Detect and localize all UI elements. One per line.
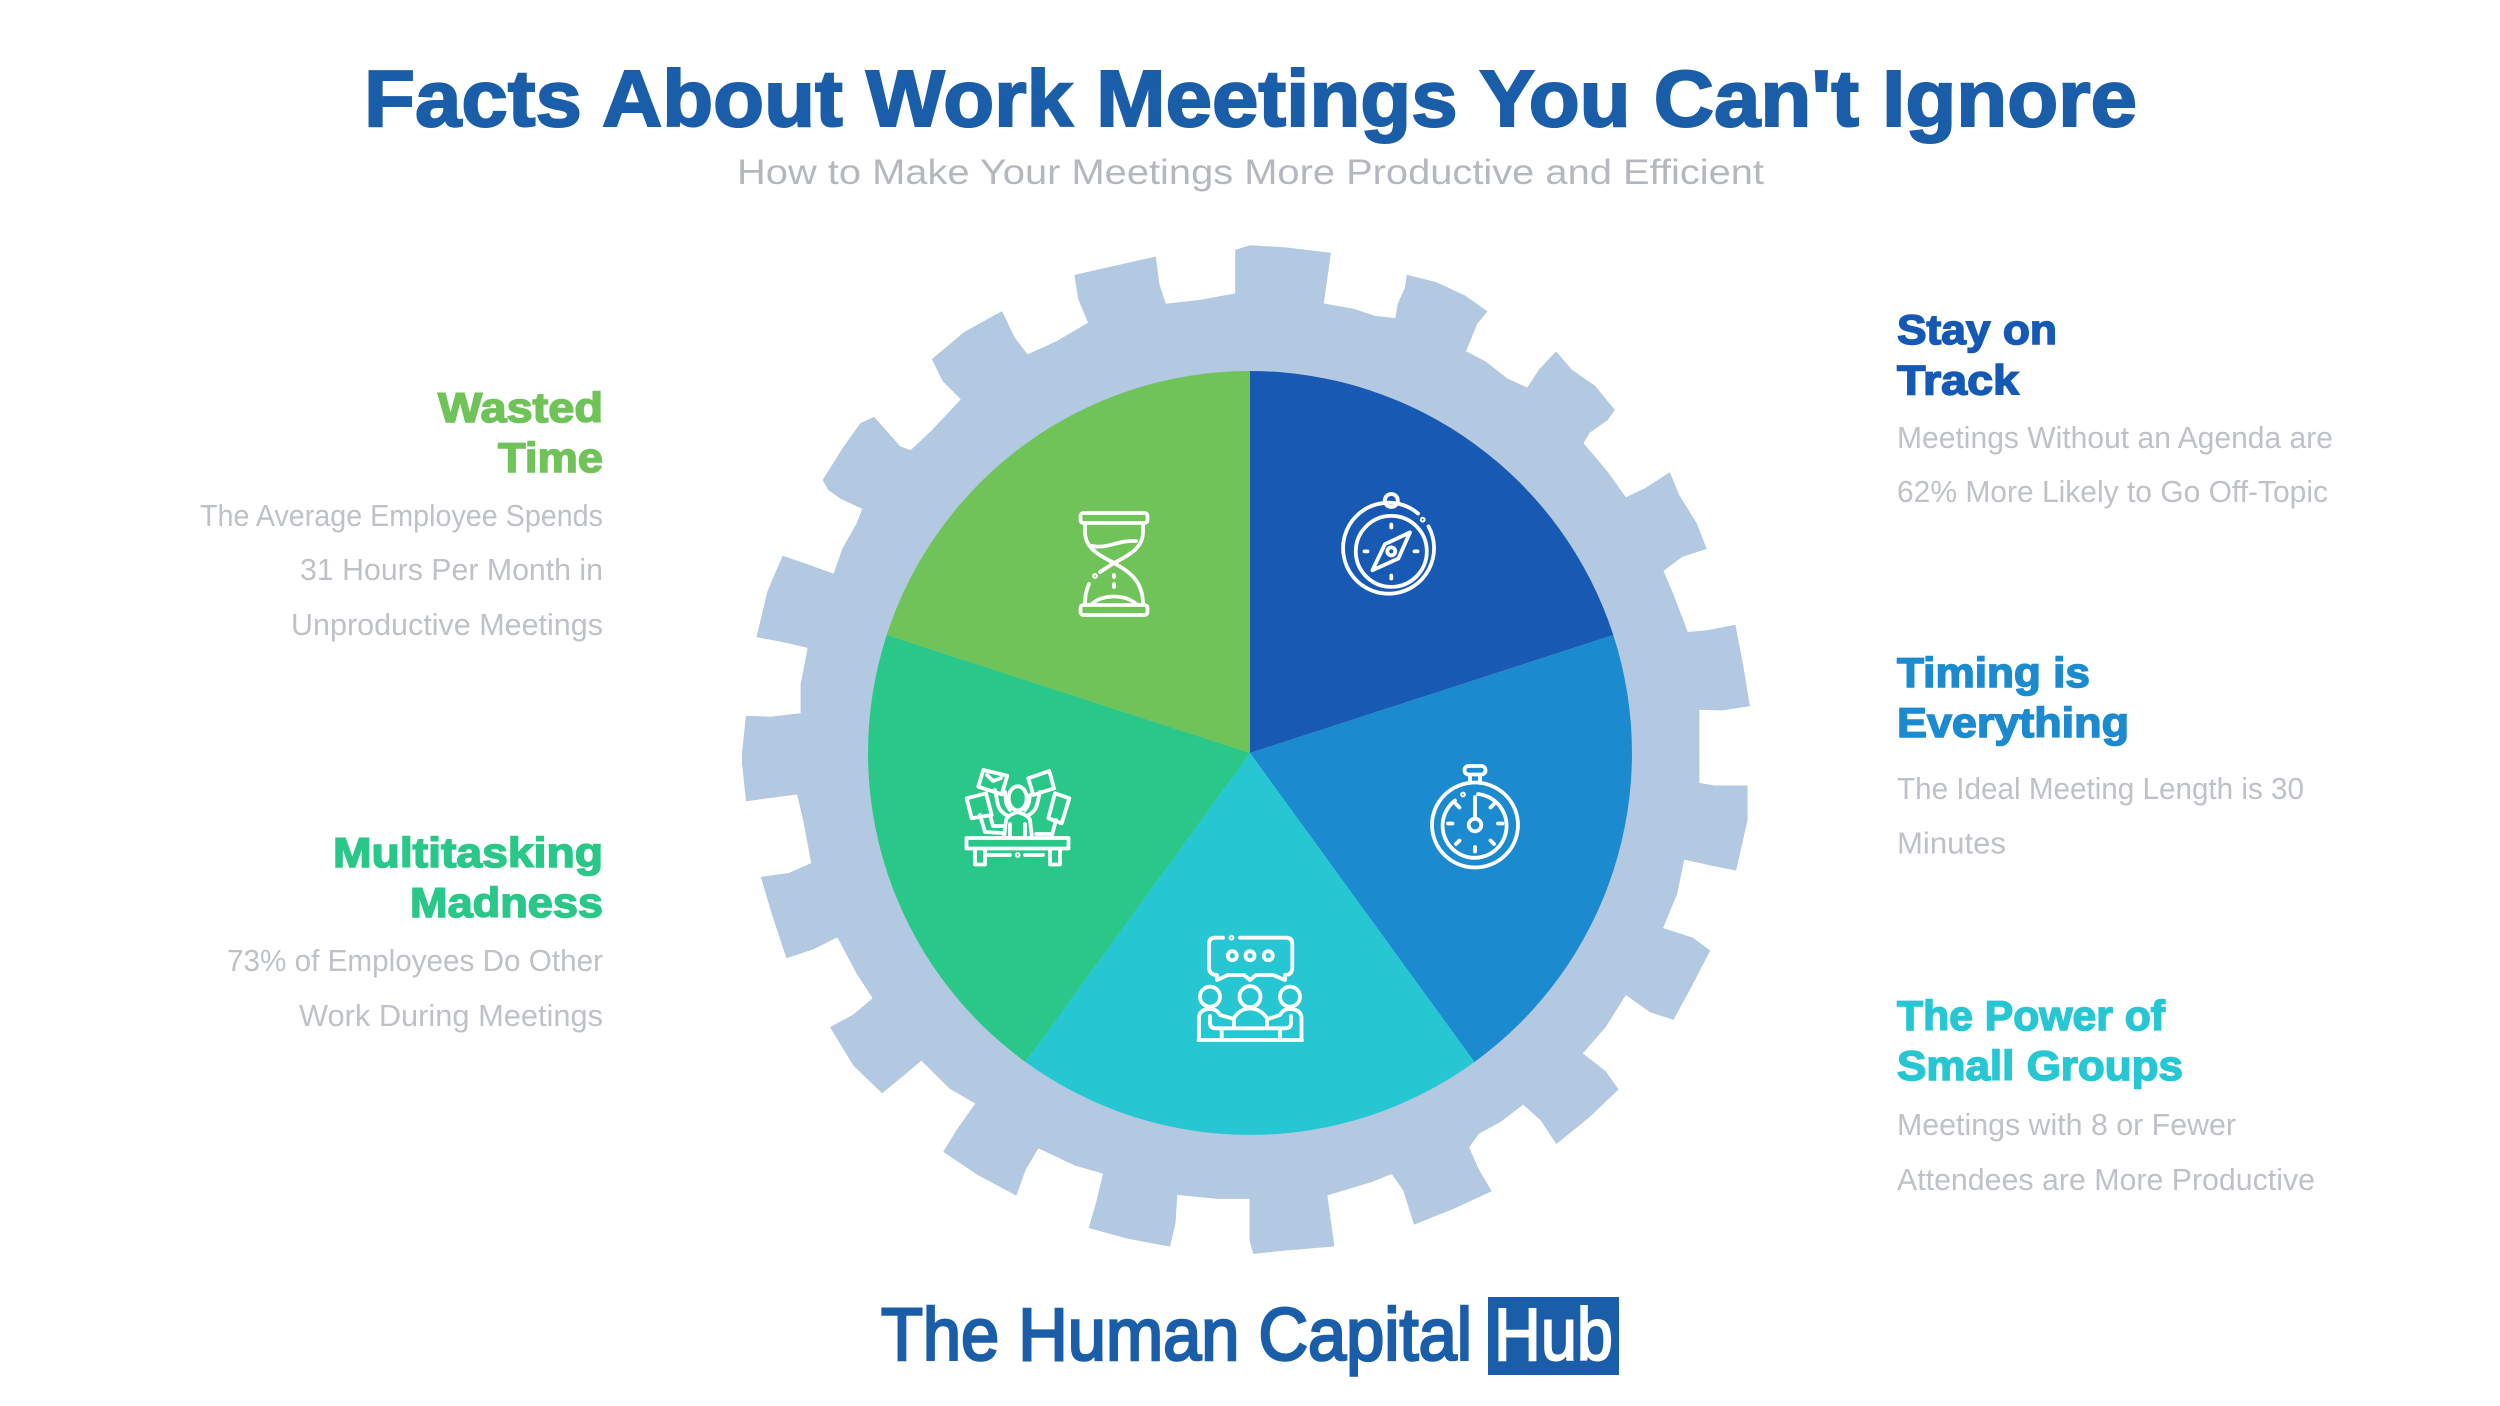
text block: stay on track	[1897, 306, 2333, 509]
body text line: Attendees are More Productive	[1897, 1162, 2315, 1197]
text block: multitasking madness	[227, 829, 603, 1033]
body text line: 62% More Likely to Go Off-Topic	[1897, 474, 2328, 509]
subtitle: How to Make Your Meetings More Productive and Efficient	[737, 153, 1764, 192]
body text line: Work During Meetings	[299, 998, 603, 1033]
gear outline: lower half	[742, 755, 1747, 1253]
body text line: 31 Hours Per Month in	[300, 552, 603, 587]
heading line: track: Track	[1897, 356, 2020, 404]
heading: stay on: Stay on	[1897, 306, 2057, 353]
pie slice: timing	[1250, 635, 1632, 1062]
heading line: small groups: Small Groups	[1897, 1042, 2183, 1089]
body text line: Meetings Without an Agenda are	[1897, 420, 2333, 455]
text block: wasted time	[200, 384, 603, 642]
body text line: Meetings with 8 or Fewer	[1897, 1107, 2236, 1142]
pie slice: multitasking	[868, 635, 1250, 1062]
heading: wasted time: Wasted	[438, 384, 603, 431]
heading line: madness: Madness	[410, 879, 603, 926]
pie slice: stay on track	[1250, 371, 1613, 753]
body text line: Minutes	[1897, 826, 2006, 860]
icon: hourglass	[1080, 513, 1148, 615]
logo wordmark: The Human Capital	[881, 1293, 1472, 1376]
icon: meeting group	[1198, 937, 1302, 1040]
body text line: The Average Employee Spends	[200, 498, 603, 533]
icon: stopwatch	[1432, 766, 1518, 868]
text block: timing is everything	[1897, 649, 2304, 860]
heading line: time: Time	[498, 434, 603, 481]
text block: power of small groups	[1897, 992, 2315, 1197]
gear outline: upper half	[742, 246, 1749, 765]
pie slice: small groups	[1026, 753, 1474, 1135]
pie slice: wasted time	[887, 371, 1250, 753]
heading: the power of: The Power of	[1897, 992, 2166, 1039]
body text line: 73% of Employees Do Other	[227, 943, 603, 978]
logo: The Human Capital Hub	[881, 1293, 1619, 1376]
heading: multitasking: Multitasking	[333, 829, 603, 876]
icon: multitasking person	[966, 770, 1069, 864]
heading line: everything: Everything	[1897, 699, 2129, 746]
icon: compass	[1343, 494, 1434, 594]
logo box	[1488, 1297, 1619, 1375]
gear wheel	[742, 246, 1749, 1253]
heading: timing is: Timing is	[1897, 649, 2090, 696]
title: Facts About Work Meetings You Can't Ignore	[364, 54, 2137, 143]
logo box label: Hub	[1494, 1293, 1613, 1376]
body text line: Unproductive Meetings	[291, 607, 603, 642]
body text line: The Ideal Meeting Length is 30	[1897, 771, 2304, 806]
